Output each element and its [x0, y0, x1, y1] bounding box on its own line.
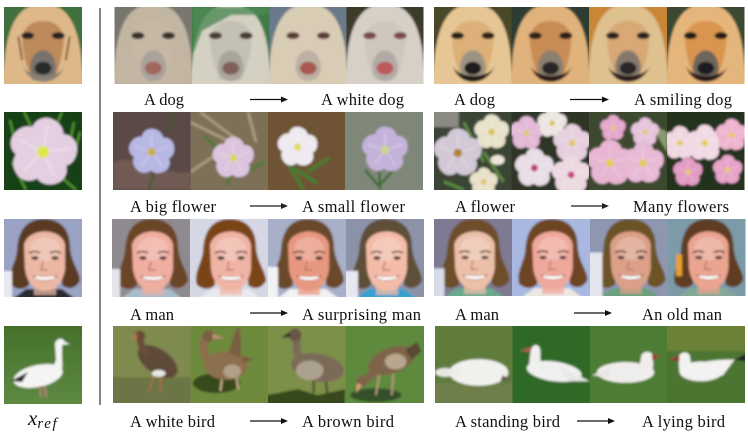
- arrow: [250, 310, 288, 316]
- arrow: [574, 310, 612, 316]
- label: x ref: ref: [37, 416, 58, 432]
- caption: A man: A man: [455, 305, 499, 324]
- image strip: standing bird to lying bird: [430, 321, 748, 408]
- caption: A big flower: A big flower: [130, 197, 216, 216]
- image strip: dog to white dog: [110, 2, 428, 89]
- arrow: [577, 418, 615, 424]
- caption: A lying bird: A lying bird: [642, 412, 726, 431]
- image strip: dog to smiling dog: [429, 2, 748, 89]
- arrow: [570, 96, 609, 102]
- image: reference flower: [4, 112, 82, 190]
- row: big to small flower: [108, 107, 428, 216]
- caption: A white dog: A white dog: [321, 90, 404, 109]
- row: lying bird: [430, 321, 748, 431]
- image strip: man to surprising man: [107, 214, 429, 302]
- caption: A standing bird: A standing bird: [455, 412, 561, 431]
- row: surprising man: [107, 214, 429, 324]
- image strip: white bird to brown bird: [108, 321, 428, 408]
- caption: A flower: A flower: [455, 197, 516, 216]
- image strip: flower to many flowers: [429, 107, 748, 198]
- row: white dog: [110, 2, 428, 109]
- row: flower to many flowers: [429, 107, 748, 216]
- label: x ref: x: [28, 406, 37, 430]
- image: reference bird: [4, 326, 82, 404]
- arrow: [250, 203, 288, 209]
- divider: vertical line: [99, 8, 101, 405]
- caption: A smiling dog: A smiling dog: [634, 90, 732, 109]
- caption: A dog: A dog: [454, 90, 495, 109]
- caption: A dog: A dog: [144, 90, 184, 109]
- row: brown bird: [108, 321, 428, 431]
- row: old man: [430, 214, 748, 324]
- arrow: [571, 203, 609, 209]
- caption: An old man: An old man: [642, 305, 722, 324]
- image: reference dog: [4, 7, 82, 84]
- caption: A small flower: A small flower: [302, 197, 406, 216]
- arrow: [250, 418, 288, 424]
- caption: Many flowers: Many flowers: [633, 197, 729, 216]
- panel: reference images column: [0, 2, 87, 409]
- caption: A white bird: A white bird: [130, 412, 216, 431]
- arrow: [250, 96, 288, 102]
- caption: A brown bird: A brown bird: [302, 412, 395, 431]
- caption: A surprising man: A surprising man: [302, 305, 421, 324]
- image strip: big flower to small flower: [108, 107, 428, 195]
- image strip: man to old man: [430, 214, 748, 301]
- image: reference man: [4, 219, 82, 297]
- caption: A man: A man: [130, 305, 174, 324]
- row: smiling dog: [429, 2, 748, 109]
